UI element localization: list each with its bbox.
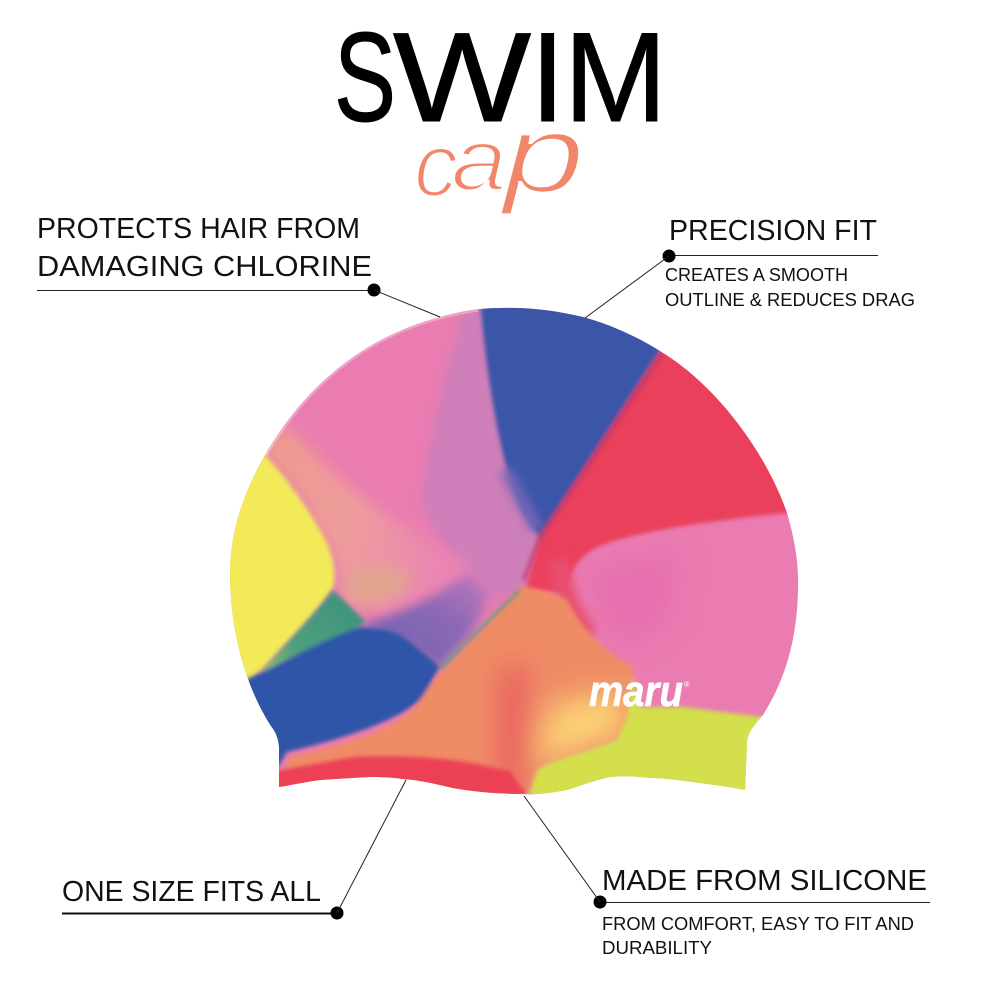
logo: maru: ®: [684, 680, 690, 689]
subtitle: cap: [414, 93, 585, 216]
callout: precision fit: OUTLINE & REDUCES DRAG: [665, 290, 915, 310]
swim cap illustration: [215, 295, 815, 805]
title: SWIM: M: [564, 6, 667, 148]
subtitle: cap: a: [451, 110, 507, 209]
rim highlight: [265, 309, 478, 455]
callout: precision fit: [585, 215, 915, 318]
title: SWIM: [334, 6, 667, 148]
title: SWIM: S: [334, 6, 396, 148]
callout: precision fit: PRECISION FIT: [669, 215, 877, 247]
title: SWIM: W: [393, 6, 531, 148]
callout: made from silicone: [524, 796, 930, 958]
subtitle: cap: c: [414, 116, 458, 216]
callout: one size fits all: ONE SIZE FITS ALL: [62, 876, 321, 908]
callout: protects hair: [37, 213, 440, 317]
callout: made from silicone: DURABILITY: [602, 938, 712, 958]
callout: precision fit: CREATES A SMOOTH: [665, 265, 848, 285]
callout: one size fits all: [62, 780, 406, 920]
logo: maru: maru: [589, 667, 683, 716]
subtitle: cap: p: [499, 93, 585, 216]
callout: protects hair: DAMAGING CHLORINE: [37, 251, 372, 283]
callout: protects hair: PROTECTS HAIR FROM: [37, 213, 360, 245]
title: SWIM: I: [530, 6, 565, 148]
callout: made from silicone: FROM COMFORT, EASY TO FIT AND: [602, 914, 914, 934]
callout: made from silicone: MADE FROM SILICONE: [602, 865, 927, 897]
